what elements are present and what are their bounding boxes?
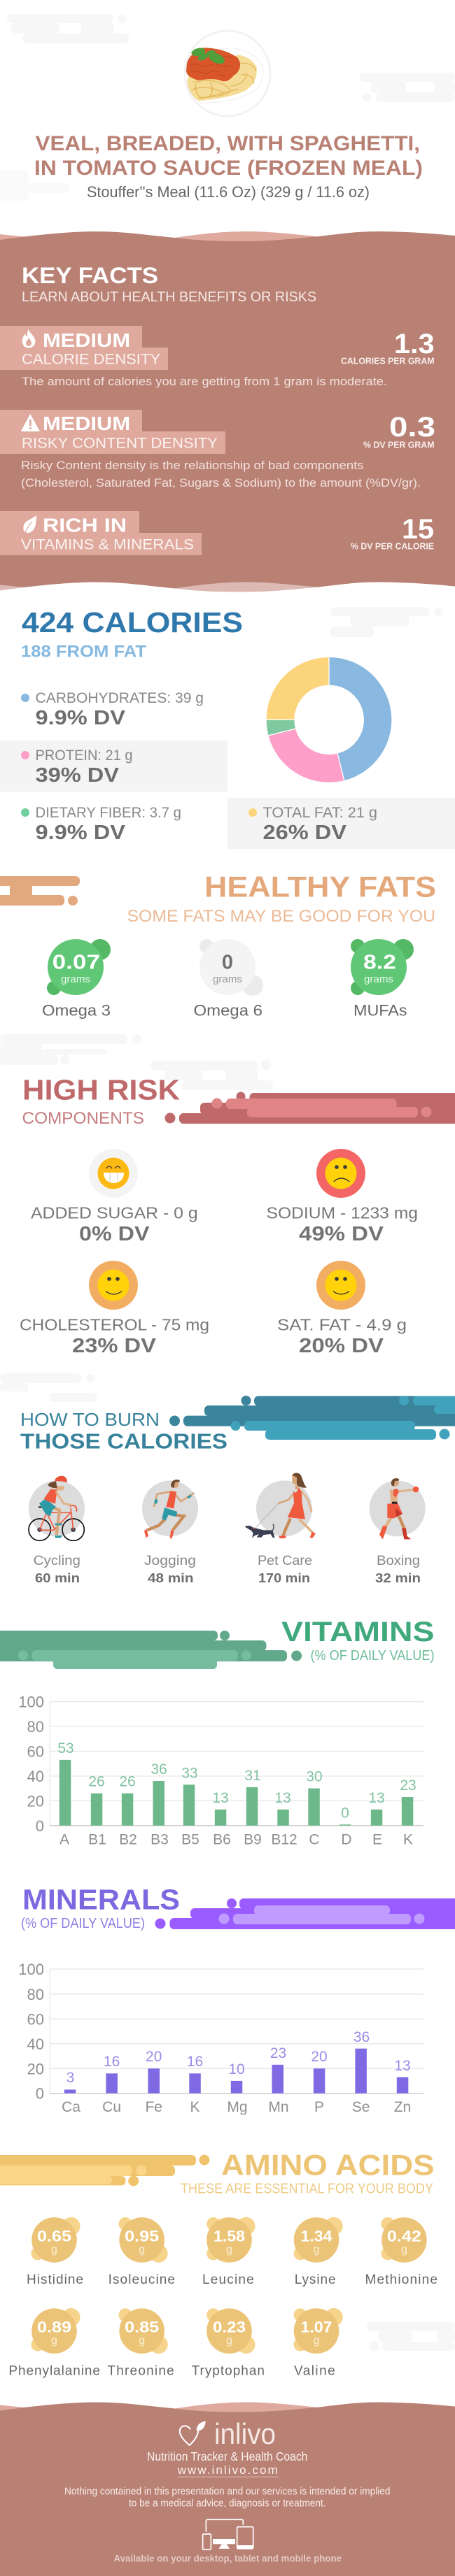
amino: lysine: Lysine (295, 2273, 336, 2287)
bar chart: vitamins: 31 (244, 1768, 261, 1784)
activity: cycling: Cycling (34, 1554, 80, 1568)
stat: omega 3 (42, 939, 111, 1019)
bar chart: vitamins: B12 (271, 1832, 298, 1848)
stat: 0.3 percent dv per gram: % DV PER GRAM (363, 441, 434, 450)
stat: omega 3: Omega 3 (42, 1002, 111, 1019)
subheading: key facts: LEARN ABOUT HEALTH BENEFITS OR RISKS (22, 289, 316, 305)
label: vitamins and minerals: VITAMINS & MINERALS (21, 536, 194, 553)
bar chart: minerals: 16 (187, 2054, 203, 2070)
item: saturated fat: 20% DV (299, 1335, 384, 1357)
amino: methionine (365, 2217, 438, 2287)
link: website: www.inlivo.com (177, 2463, 278, 2477)
heading: vitamins: VITAMINS (281, 1617, 434, 1647)
badge: rich in vitamins and minerals (0, 511, 202, 555)
bar chart: minerals: 100 (18, 1961, 44, 1978)
bar chart: vitamins: B9 (244, 1832, 262, 1848)
stat: 0.3 percent dv per gram (363, 412, 435, 450)
legend: protein (0, 740, 228, 792)
bar chart: minerals (18, 1961, 424, 2115)
stat: mufas (351, 939, 414, 1019)
item: sodium: 49% DV (299, 1223, 384, 1245)
activity: boxing (370, 1478, 426, 1585)
heading: key facts: KEY FACTS (22, 263, 158, 288)
item: saturated fat: SAT. FAT - 4.9 g (277, 1316, 407, 1334)
bar chart: minerals: 20 (27, 2060, 44, 2077)
subtitle: serving: Stouffer''s Meal (11.6 Oz) (329 g / 11.6 oz) (87, 183, 370, 201)
legend: protein: 39% DV (35, 764, 120, 787)
subheading: healthy fats: SOME FATS MAY BE GOOD FOR YOU (127, 907, 435, 926)
bar chart: vitamins: B6 (213, 1832, 231, 1848)
title (34, 132, 423, 180)
item: cholesterol: 23% DV (72, 1335, 156, 1357)
stat: omega 6: grams (213, 973, 242, 985)
amino: valine: Valine (294, 2363, 335, 2379)
bar chart: vitamins: 20 (27, 1792, 44, 1810)
amino: phenylalanine: 0.89 (37, 2319, 71, 2336)
item: saturated fat (277, 1261, 407, 1357)
legend: dietary fiber: 9.9% DV (35, 822, 126, 844)
bar chart: minerals: Se (352, 2099, 370, 2115)
amino: threonine: Threonine (107, 2363, 174, 2379)
activity: boxing: Boxing (377, 1554, 420, 1568)
amino: tryptophan (192, 2308, 265, 2379)
amino: phenylalanine (8, 2308, 100, 2379)
decorative band: healthy fats (0, 876, 80, 906)
legend: dietary fiber (21, 805, 181, 844)
bar chart: minerals: P (314, 2099, 324, 2115)
item: cholesterol: CHOLESTEROL - 75 mg (20, 1316, 209, 1334)
heading: those calories: THOSE CALORIES (20, 1429, 227, 1453)
bar chart: minerals: Fe (145, 2099, 162, 2115)
title: VEAL, BREADED, WITH SPAGHETTI, (35, 132, 420, 155)
bar chart: vitamins: 36 (150, 1761, 167, 1777)
bar chart: vitamins: 13 (274, 1790, 291, 1806)
legend: total fat (227, 798, 455, 849)
bar chart: vitamins: 13 (368, 1790, 385, 1806)
hero: food image (185, 31, 270, 116)
decorative band: minerals (155, 1898, 455, 1929)
amino: isoleucine: Isoleucine (108, 2273, 175, 2287)
panel: footer (0, 2403, 455, 2576)
label: risky content density: RISKY CONTENT DENSITY (22, 435, 218, 452)
heading: 424 calories: 424 CALORIES (22, 606, 243, 638)
bar chart: vitamins: 53 (57, 1740, 74, 1756)
text: availability: Available on your desktop, tablet and mobile phone (113, 2552, 342, 2563)
bar chart: vitamins: 33 (181, 1765, 198, 1781)
bar chart: vitamins: 80 (27, 1718, 44, 1736)
logo: inlivo: inlivo (214, 2417, 276, 2450)
activity: jogging (142, 1480, 198, 1585)
amino: threonine (107, 2308, 174, 2379)
stat: omega 6: 0 (222, 952, 233, 974)
bar chart: minerals: Mn (268, 2099, 289, 2115)
amino: phenylalanine: Phenylalanine (8, 2363, 100, 2379)
amino: threonine: g (139, 2335, 145, 2347)
bar chart: vitamins: D (341, 1832, 352, 1848)
bar chart: minerals: 13 (394, 2058, 411, 2074)
label: calorie density: CALORIE DENSITY (22, 351, 160, 368)
bar chart: vitamins: 60 (27, 1743, 44, 1761)
heading: amino acids: AMINO ACIDS (221, 2149, 434, 2182)
label: medium: MEDIUM (43, 413, 130, 434)
amino: tryptophan: 0.23 (213, 2319, 246, 2336)
bar chart: vitamins: 26 (119, 1774, 136, 1790)
decorative band: vitamins (0, 1631, 302, 1669)
legend: carbohydrates: CARBOHYDRATES: 39 g (35, 690, 204, 706)
bar chart: vitamins: E (372, 1832, 382, 1848)
icon: leaf (23, 515, 36, 533)
legend: carbohydrates: 9.9% DV (35, 707, 126, 729)
text: calorie density description: The amount of calories you are getting from 1 gram is moderate. (22, 375, 387, 388)
amino: leucine: Leucine (202, 2273, 254, 2287)
bar chart: minerals: Zn (394, 2099, 411, 2115)
badge: medium calorie density (0, 326, 168, 370)
amino: histidine: 0.65 (37, 2228, 71, 2245)
bar chart: minerals: Mg (227, 2099, 248, 2115)
bar chart: minerals: 10 (228, 2061, 245, 2077)
legend: protein: PROTEIN: 21 g (35, 747, 133, 764)
icon: flame (22, 329, 35, 348)
item: added sugar: ADDED SUGAR - 0 g (31, 1204, 198, 1222)
heading: high risk: HIGH RISK (22, 1074, 180, 1106)
panel: amino acids (0, 2149, 438, 2379)
bar chart: vitamins: A (59, 1832, 69, 1848)
bar chart: vitamins: 23 (400, 1777, 416, 1794)
activity: pet care: Pet Care (258, 1554, 312, 1568)
bar chart: vitamins: B3 (150, 1832, 169, 1848)
bar chart: minerals: Cu (102, 2099, 121, 2115)
subheading: components: COMPONENTS (22, 1109, 144, 1128)
activity: boxing: 32 min (375, 1571, 421, 1585)
panel: healthy fats (0, 870, 436, 1019)
text: disclaimer: to be a medical advice, diagnosis or treatment. (129, 2498, 326, 2510)
panel: how to burn those calories (20, 1396, 455, 1585)
legend: carbohydrates (21, 690, 204, 729)
amino: lysine: g (314, 2244, 319, 2256)
bar chart: vitamins: 0 (36, 1817, 44, 1835)
amino: isoleucine: 0.95 (125, 2228, 159, 2245)
legend: dietary fiber: DIETARY FIBER: 3.7 g (35, 805, 181, 821)
bar chart: minerals: 20 (146, 2049, 162, 2065)
amino: threonine: 0.85 (125, 2319, 159, 2336)
logo: inlivo (180, 2417, 276, 2450)
stat: omega 3: 0.07 (52, 952, 100, 974)
heading: minerals: MINERALS (22, 1884, 180, 1916)
stat: 15 percent dv per calorie: 15 (402, 514, 434, 545)
stat: 15 percent dv per calorie: % DV PER CALORIE (351, 542, 434, 552)
bar chart: minerals: 23 (270, 2045, 286, 2061)
bar chart: vitamins: 26 (88, 1774, 105, 1790)
stat: 1.3 calories per gram: 1.3 (394, 329, 434, 359)
stat: 1.3 calories per gram (341, 329, 434, 366)
text: risky content description: (Cholesterol, Saturated Fat, Sugars & Sodium) to the amount (%DV/gr). (21, 477, 421, 489)
bar chart: vitamins: 0 (341, 1805, 349, 1821)
bar chart: minerals: 40 (27, 2035, 44, 2053)
panel: vitamins (0, 1617, 434, 1848)
amino: histidine: g (51, 2244, 57, 2256)
stat: omega 6 (193, 939, 263, 1019)
amino: valine (294, 2308, 343, 2379)
activity: pet care: 170 min (258, 1571, 310, 1585)
amino: histidine (27, 2217, 83, 2287)
bar chart: vitamins: 40 (27, 1768, 44, 1785)
subheading: essential: THESE ARE ESSENTIAL FOR YOUR BODY (181, 2182, 433, 2197)
bar chart: vitamins: B5 (181, 1832, 200, 1848)
activity: cycling (29, 1476, 85, 1585)
stat: 15 percent dv per calorie (351, 514, 434, 552)
activity: jogging: 48 min (148, 1571, 193, 1585)
amino: lysine (294, 2217, 343, 2287)
decorative band: burn (169, 1396, 455, 1440)
bar chart: vitamins: C (309, 1832, 320, 1848)
decorative band: high risk (165, 1092, 455, 1124)
bar chart: minerals: 3 (66, 2070, 74, 2086)
bar chart: minerals: 80 (27, 1986, 44, 2003)
panel: calories (0, 606, 455, 849)
subheading: 188 from fat: 188 FROM FAT (21, 643, 146, 661)
heading: how to burn: HOW TO BURN (20, 1409, 160, 1430)
stat: mufas: grams (364, 973, 393, 985)
bar chart: minerals: 0 (36, 2085, 44, 2103)
panel: key facts (0, 231, 455, 606)
text: risky content description (21, 459, 421, 489)
amino: valine: 1.07 (301, 2319, 332, 2336)
item: sodium (266, 1149, 418, 1245)
amino: isoleucine: g (139, 2244, 145, 2256)
stat: omega 3: grams (61, 973, 90, 985)
amino: histidine: Histidine (27, 2273, 83, 2287)
subheading: percent of daily value: (% OF DAILY VALUE) (311, 1648, 434, 1663)
amino: leucine: 1.58 (214, 2228, 245, 2245)
text: disclaimer (64, 2486, 391, 2510)
amino: phenylalanine: g (51, 2335, 57, 2347)
legend: total fat: 26% DV (263, 822, 347, 844)
title: IN TOMATO SAUCE (FROZEN MEAL) (34, 157, 423, 180)
bar chart: minerals: 20 (311, 2049, 328, 2065)
bar chart: vitamins: K (403, 1832, 413, 1848)
text: tagline: Nutrition Tracker & Health Coach (147, 2449, 307, 2463)
amino: leucine (202, 2217, 255, 2287)
bar chart: vitamins: 30 (306, 1769, 323, 1785)
stat: mufas: MUFAs (354, 1002, 407, 1019)
subheading: percent of daily value: (% OF DAILY VALUE) (21, 1916, 145, 1931)
icon: devices (203, 2519, 253, 2549)
decorative band: amino acids (0, 2155, 210, 2186)
label: medium: MEDIUM (43, 329, 130, 351)
bar chart: vitamins (18, 1694, 424, 1848)
stat: omega 6: Omega 6 (193, 1002, 262, 1019)
amino: methionine: 0.42 (387, 2228, 421, 2245)
donut chart (266, 657, 392, 782)
item: added sugar (31, 1149, 198, 1245)
item: sodium: SODIUM - 1233 mg (266, 1204, 418, 1222)
amino: lysine: 1.34 (301, 2228, 332, 2245)
stat: 1.3 calories per gram: CALORIES PER GRAM (341, 357, 434, 366)
bar chart: minerals: 16 (104, 2054, 120, 2070)
panel: minerals (18, 1884, 455, 2115)
stat: 0.3 percent dv per gram: 0.3 (389, 412, 435, 443)
bar chart: vitamins: 13 (212, 1790, 229, 1806)
badge: medium risky content density (0, 410, 225, 454)
label: rich in: RICH IN (43, 515, 127, 536)
stat: mufas: 8.2 (363, 952, 396, 974)
heading: healthy fats: HEALTHY FATS (204, 870, 436, 903)
amino: leucine: g (226, 2244, 232, 2256)
amino: valine: g (314, 2335, 319, 2347)
amino: tryptophan: g (226, 2335, 232, 2347)
bar chart: vitamins: B2 (119, 1832, 137, 1848)
activity: pet care (246, 1473, 316, 1585)
amino: isoleucine (108, 2217, 175, 2287)
icon: warning (21, 414, 40, 431)
bar chart: vitamins: B1 (88, 1832, 106, 1848)
activity: cycling: 60 min (35, 1571, 80, 1585)
amino: tryptophan: Tryptophan (192, 2363, 265, 2379)
bar chart: minerals: Ca (62, 2099, 80, 2115)
item: added sugar: 0% DV (79, 1223, 150, 1245)
panel: high risk components (20, 1074, 455, 1357)
activity: jogging: Jogging (144, 1554, 196, 1568)
bar chart: minerals: K (190, 2099, 200, 2115)
amino: methionine: Methionine (365, 2273, 438, 2287)
text: risky content description: Risky Content density is the relationship of bad components (21, 459, 364, 472)
bar chart: minerals: 36 (354, 2029, 370, 2045)
bar chart: minerals: 60 (27, 2010, 44, 2028)
bar chart: vitamins: 100 (18, 1694, 44, 1711)
amino: methionine: g (401, 2244, 407, 2256)
text: disclaimer: Nothing contained in this presentation and our services is intended or implied (64, 2486, 391, 2498)
item: cholesterol (20, 1261, 209, 1357)
legend: total fat: TOTAL FAT: 21 g (263, 805, 377, 821)
